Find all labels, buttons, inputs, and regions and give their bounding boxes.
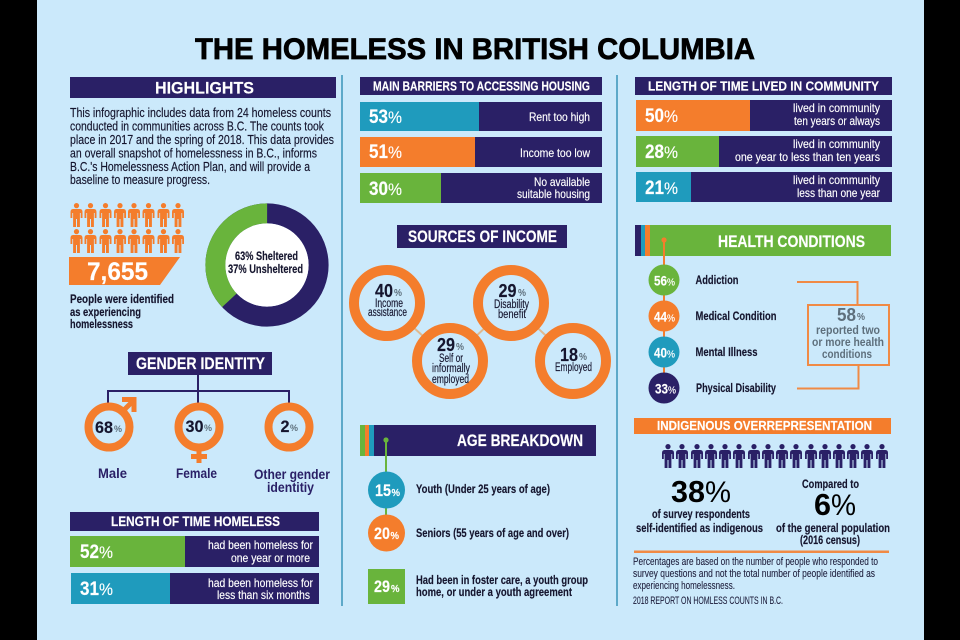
bar: 21% less than one year: % <box>664 179 678 198</box>
ring: self or informally employed: employed <box>432 374 469 386</box>
heading: main barriers: MAIN BARRIERS TO ACCESSING HOUSING <box>373 78 590 94</box>
ring: self or informally employed: % <box>456 342 464 353</box>
callout: 7,655 <box>69 257 180 286</box>
text: medical condition: Medical Condition <box>696 309 776 323</box>
bar: rent too high <box>360 102 602 131</box>
bar: income too low: % <box>388 143 402 162</box>
panel: length of time homeless <box>70 512 319 604</box>
circle: medical condition 44% <box>648 300 680 332</box>
bar: 21% less than one year: less than one year <box>797 186 880 200</box>
bar: no available housing: No available <box>534 175 590 189</box>
icon: female ring 30% <box>178 406 220 463</box>
circle: physical disability 33%: % <box>668 386 676 396</box>
heading: length of time homeless <box>70 512 319 531</box>
circle: mental illness 40%: % <box>667 350 675 360</box>
panel: gender identity <box>88 352 330 495</box>
highlights text block: baseline to measure progress. <box>70 173 210 187</box>
label: male: Male <box>98 465 127 481</box>
highlights text block: place in 2017 and the spring of 2018. This data provides <box>70 133 334 147</box>
circle: addiction 56%: % <box>667 278 675 288</box>
icon: row of people <box>662 444 888 468</box>
bar: 52%: one year or more <box>231 551 310 565</box>
bar: 50% ten years or always: lived in community <box>793 101 880 115</box>
bar: 28% one year to ten years: lived in community <box>793 137 880 151</box>
bar: 28% one year to ten years: one year to less than ten years <box>735 150 880 164</box>
circle: physical disability 33% <box>648 372 680 404</box>
label: female: Female <box>176 465 217 481</box>
icon: male ring 68%: 68 <box>95 418 113 437</box>
stat: 38%: % <box>705 476 731 509</box>
heading: health conditions: HEALTH CONDITIONS <box>718 233 865 251</box>
bar: rent too high: Rent too high <box>529 110 590 124</box>
heading: sources of income: SOURCES OF INCOME <box>408 227 557 246</box>
donut chart: sheltered vs unsheltered: 37% Unsheltered <box>228 262 303 276</box>
bar: 21% less than one year <box>636 172 892 202</box>
stat: 6% <box>776 477 890 547</box>
ring: employed <box>540 328 606 394</box>
bar: 31%: less than six months <box>217 588 310 602</box>
ring: disability benefit: 29 <box>498 281 516 301</box>
highlights heading: HIGHLIGHTS <box>155 80 254 98</box>
stat: 38%: of survey respondents <box>652 509 750 521</box>
bar: income too low: Income too low <box>520 146 590 160</box>
square: foster care 29% <box>368 569 405 604</box>
footnote: 2018 REPORT ON HOMLESS COUNTS IN B.C. <box>633 595 783 607</box>
label: other gender identity <box>254 466 330 495</box>
bar: 31%: 31 <box>80 579 99 600</box>
circle: seniors 20% <box>368 514 405 552</box>
text: addiction: Addiction <box>696 273 738 287</box>
highlights text block <box>70 106 334 187</box>
bar: 28% one year to ten years: % <box>664 143 678 162</box>
callout: 58% reported two or more <box>797 282 889 388</box>
text: foster care <box>416 573 588 599</box>
ring: income assistance: 40 <box>375 281 393 301</box>
heading: length of time lived: LENGTH OF TIME LIVED IN COMMUNITY <box>648 78 879 94</box>
bar: rent too high: 53 <box>369 107 388 128</box>
donut chart: sheltered vs unsheltered: 63% Sheltered <box>235 249 298 263</box>
callout: 58% reported two or more: reported two <box>816 323 880 337</box>
callout: 7,655: 7,655 <box>87 258 148 286</box>
square: foster care 29%: 29 <box>374 577 390 596</box>
icon: male ring 68%: % <box>114 424 123 435</box>
icon: other ring 2%: % <box>290 423 299 434</box>
panel: highlights <box>69 77 340 338</box>
bar: no available housing: 30 <box>369 179 388 200</box>
label: other gender identity: Other gender <box>254 466 330 482</box>
ring: disability benefit: benefit <box>498 309 527 321</box>
gender identity heading: GENDER IDENTITY <box>136 354 266 373</box>
icon: female ring 30%: 30 <box>186 417 204 436</box>
stat: 6%: (2016 census) <box>800 535 860 547</box>
panel: age breakdown <box>360 425 596 604</box>
bar: 31%: % <box>99 580 113 599</box>
ring: self or informally employed: Self or <box>439 353 463 365</box>
circle: mental illness 40%: 40 <box>654 344 667 360</box>
footnote <box>633 556 878 607</box>
bar: 28% one year to ten years: 28 <box>645 142 664 163</box>
text: people identified: People were identified <box>70 292 174 306</box>
ring: disability benefit: % <box>518 288 526 299</box>
callout: 58% reported two or more: or more health <box>812 335 884 349</box>
bar: 21% less than one year: lived in community <box>793 173 880 187</box>
bar: 52%: % <box>99 543 113 562</box>
footnote: Percentages are based on the number of people who responded to <box>633 556 878 568</box>
bar: 50% ten years or always: % <box>664 107 678 126</box>
stat: 38% <box>636 474 763 535</box>
square: foster care 29%: % <box>391 584 400 595</box>
text: mental illness: Mental Illness <box>696 345 758 359</box>
bar: 21% less than one year: 21 <box>645 178 664 199</box>
ring: employed: Employed <box>555 362 592 374</box>
text: foster care: home, or under a youth agreement <box>416 585 572 599</box>
heading: age breakdown <box>360 425 596 456</box>
circle: addiction 56% <box>648 264 680 296</box>
bar: no available housing <box>360 173 602 203</box>
ring: disability benefit <box>478 270 544 336</box>
bar: rent too high: % <box>388 108 402 127</box>
text: seniors: Seniors (55 years of age and over) <box>416 526 569 540</box>
bar: 52%: 52 <box>80 542 99 563</box>
stat: 6%: % <box>831 489 856 522</box>
stat: 38%: self-identified as indigenous <box>636 523 763 535</box>
ring: self or informally employed: 29 <box>437 335 455 355</box>
highlights text block: This infographic includes data from 24 homeless counts <box>70 106 331 120</box>
ring: employed: % <box>579 352 587 363</box>
bar: 31% <box>71 573 319 604</box>
highlights text block: B.C.'s Homelessness Action Plan, and will provide a <box>70 160 310 174</box>
bar: 52% <box>70 536 319 567</box>
heading: length of time homeless: LENGTH OF TIME HOMELESS <box>111 514 280 529</box>
bar: income too low <box>360 137 602 167</box>
callout: 58% reported two or more: conditions <box>822 347 872 361</box>
bar: no available housing: % <box>388 180 402 199</box>
stat: 6%: Compared to <box>802 477 859 491</box>
stat: 6%: of the general population <box>776 523 890 535</box>
bar: 50% ten years or always: 50 <box>645 106 664 127</box>
heading: indigenous overrepresentation: INDIGENOUS OVERREPRESENTATION <box>657 418 872 433</box>
callout: 58% reported two or more: % <box>857 312 865 323</box>
ring: income assistance: Income <box>375 298 403 310</box>
heading: main barriers <box>360 77 602 95</box>
ring: income assistance: assistance <box>368 307 407 319</box>
icon: female ring 30%: % <box>204 423 213 434</box>
donut chart: sheltered vs unsheltered <box>194 192 340 338</box>
icon: other ring 2% <box>268 406 310 448</box>
panel: sources of income <box>354 225 606 394</box>
circle: seniors 20%: % <box>390 531 399 542</box>
highlights text block: an overall snapshot of homelessness in B.C., informs <box>70 146 317 160</box>
bar: 28% one year to ten years <box>636 136 892 167</box>
heading: sources of income <box>397 225 567 248</box>
icon: male ring 68% <box>88 400 134 448</box>
icon: other ring 2%: 2 <box>280 417 290 436</box>
circle: medical condition 44%: 44 <box>654 308 667 324</box>
circle: seniors 20%: 20 <box>374 524 390 543</box>
title: THE HOMELESS IN BRITISH COLUMBIA <box>195 33 755 66</box>
text: people identified: as experiencing <box>70 305 141 319</box>
heading: age breakdown: AGE BREAKDOWN <box>457 432 583 450</box>
ring: self or informally employed <box>417 328 483 394</box>
stat: 38%: 38 <box>671 474 705 509</box>
icon: rows of people <box>70 203 184 253</box>
ring: self or informally employed: informally <box>432 363 470 375</box>
footnote: survey questions and not the total number of people identified as <box>633 568 875 580</box>
circle: medical condition 44%: % <box>667 314 675 324</box>
bar: 50% ten years or always: ten years or always <box>794 114 880 128</box>
ring: income assistance: % <box>394 288 402 299</box>
bar: 31%: had been homeless for <box>208 576 313 590</box>
circle: youth 15% <box>368 472 405 508</box>
ring: disability benefit: Disability <box>494 299 529 311</box>
text: people identified: homelessness <box>70 317 133 331</box>
ring: income assistance <box>354 270 420 336</box>
text: people identified <box>70 292 174 331</box>
text: physical disability: Physical Disability <box>696 381 776 395</box>
panel: indigenous overrepresentation <box>633 418 891 607</box>
text: youth: Youth (Under 25 years of age) <box>416 482 550 496</box>
bar: 52%: had been homeless for <box>208 538 313 552</box>
stat: 6%: 6 <box>814 487 831 522</box>
text: foster care: Had been in foster care, a youth group <box>416 573 588 587</box>
circle: physical disability 33%: 33 <box>655 380 668 396</box>
panel: main barriers <box>360 77 602 203</box>
heading: health conditions <box>635 225 891 256</box>
footnote: experiencing homelessness. <box>633 580 735 592</box>
panel: health conditions <box>635 225 891 404</box>
ring: employed: 18 <box>560 345 578 365</box>
bar: 50% ten years or always <box>636 100 892 131</box>
highlights heading <box>70 77 336 98</box>
circle: mental illness 40% <box>648 336 680 368</box>
label: other gender identity: identitiy <box>267 479 314 495</box>
panel: length of time lived in community <box>635 77 892 202</box>
circle: addiction 56%: 56 <box>654 272 667 288</box>
callout: 58% reported two or more: 58 <box>837 305 856 325</box>
bar: income too low: 51 <box>369 142 388 163</box>
circle: youth 15%: % <box>392 488 400 499</box>
circle: youth 15%: 15 <box>375 481 391 500</box>
highlights text block: conducted in communities across B.C. The counts took <box>70 120 325 134</box>
bar: no available housing: suitable housing <box>517 187 590 201</box>
